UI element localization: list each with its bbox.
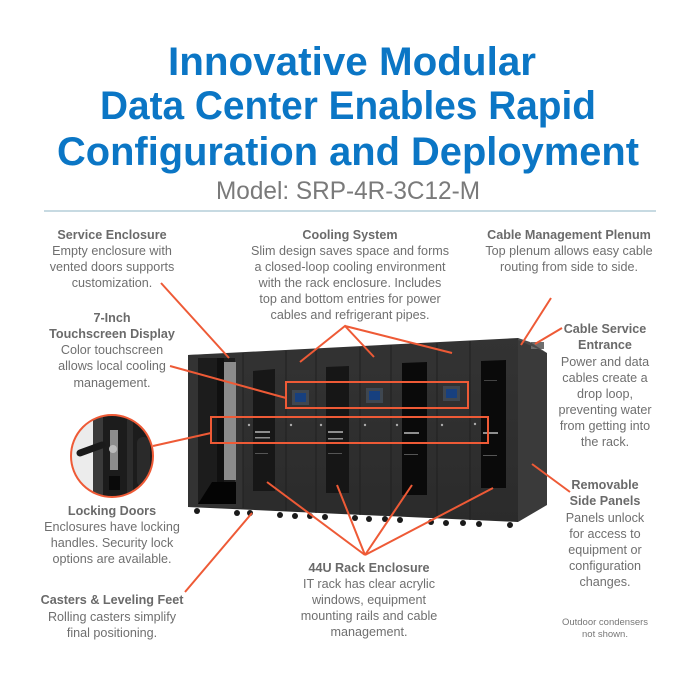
title: Configuration and Deployment — [57, 130, 639, 174]
front face — [188, 338, 518, 522]
text: cooling system: a closed-loop cooling environment — [254, 260, 446, 274]
title: Innovative Modular — [168, 40, 536, 84]
text: removable side panels: Removable — [571, 478, 639, 492]
text: cable service entrance: cables create a — [562, 371, 648, 385]
text: cooling system: Cooling System — [302, 228, 398, 242]
enclosure seams — [243, 341, 470, 520]
footnote — [562, 617, 648, 640]
text: cable service entrance: Power and data — [561, 355, 649, 369]
text: cable service entrance: drop loop, — [577, 387, 633, 401]
text: removable side panels: Side Panels — [570, 494, 640, 508]
text: cable management plenum: routing from side to side. — [500, 260, 638, 274]
text: touchscreen display: 7-Inch — [93, 311, 131, 325]
text: cooling system: with the rack enclosure. Includes — [258, 276, 441, 290]
text: touchscreen display: Color touchscreen — [61, 343, 163, 357]
text: locking doors: Locking Doors — [68, 504, 156, 518]
title: Data Center Enables Rapid — [100, 84, 596, 128]
text: service enclosure: vented doors supports — [50, 260, 174, 274]
right side panel — [518, 338, 547, 522]
text: service enclosure: Service Enclosure — [57, 228, 167, 242]
top unit on roof — [531, 342, 544, 349]
product image: modular data center racks — [188, 338, 547, 528]
footnote: not shown. — [582, 629, 628, 640]
service enclosure — [188, 353, 243, 508]
text: casters: Casters & Leveling Feet — [41, 593, 184, 607]
text: service enclosure: customization. — [72, 276, 152, 290]
text: touchscreen display: allows local cooling — [58, 359, 166, 373]
text: removable side panels: equipment or — [568, 543, 642, 557]
text: removable side panels: changes. — [579, 575, 631, 589]
title — [57, 40, 639, 174]
text: casters: Rolling casters simplify — [48, 610, 177, 624]
text: cable service entrance: Cable Service — [564, 322, 646, 336]
door handles and rails — [255, 380, 498, 456]
text: cable management plenum: Cable Management Plenum — [487, 228, 651, 242]
text: touchscreen display: Touchscreen Display — [49, 327, 175, 341]
text: 44U rack enclosure: IT rack has clear acrylic — [303, 577, 435, 591]
text: 44U rack enclosure: management. — [330, 625, 408, 639]
text: removable side panels: configuration — [569, 559, 641, 573]
text: locking doors — [44, 504, 180, 566]
text: cooling system: cables and refrigerant pipes. — [271, 308, 429, 322]
icon: locking door detail circle — [70, 414, 155, 498]
rack door windows — [253, 369, 275, 491]
text: cable service entrance: from getting into — [560, 419, 650, 433]
text: locking doors: Enclosures have locking — [44, 520, 180, 534]
text: touchscreen display: management. — [73, 376, 151, 390]
text: casters: final positioning. — [67, 626, 157, 640]
casters — [194, 508, 513, 528]
text: casters — [41, 593, 184, 640]
text: cable service entrance: the rack. — [581, 435, 629, 449]
text: 44U rack enclosure — [301, 561, 437, 639]
text: 44U rack enclosure: windows, equipment — [311, 593, 427, 607]
text: cooling system — [251, 228, 449, 322]
callout frame: locking door row — [211, 417, 488, 443]
subtitle: model: Model: SRP-4R-3C12-M — [216, 177, 480, 205]
callout frame: touchscreen row — [286, 382, 468, 408]
footnote: Outdoor condensers — [562, 617, 648, 628]
text: removable side panels: for access to — [569, 527, 641, 541]
text: cooling system: top and bottom entries for power — [259, 292, 441, 306]
text: service enclosure — [50, 228, 174, 290]
text: removable side panels — [566, 478, 645, 589]
text: locking doors: options are available. — [52, 552, 172, 566]
touchscreens — [292, 386, 460, 405]
lock indicators — [248, 423, 476, 426]
text: service enclosure: Empty enclosure with — [52, 244, 172, 258]
text: cable service entrance — [558, 322, 652, 449]
text: cable management plenum — [485, 228, 653, 274]
text: cable management plenum: Top plenum allows easy cable — [485, 244, 653, 258]
text: 44U rack enclosure: 44U Rack Enclosure — [308, 561, 430, 575]
text: cable service entrance: Entrance — [578, 338, 632, 352]
text: locking doors: handles. Security lock — [51, 536, 174, 550]
text: cable service entrance: preventing water — [558, 403, 652, 417]
text: touchscreen display — [49, 311, 175, 390]
text: 44U rack enclosure: mounting rails and cable — [301, 609, 437, 623]
text: removable side panels: Panels unlock — [566, 511, 645, 525]
text: cooling system: Slim design saves space and forms — [251, 244, 449, 258]
arrows: leader lines — [153, 283, 570, 592]
